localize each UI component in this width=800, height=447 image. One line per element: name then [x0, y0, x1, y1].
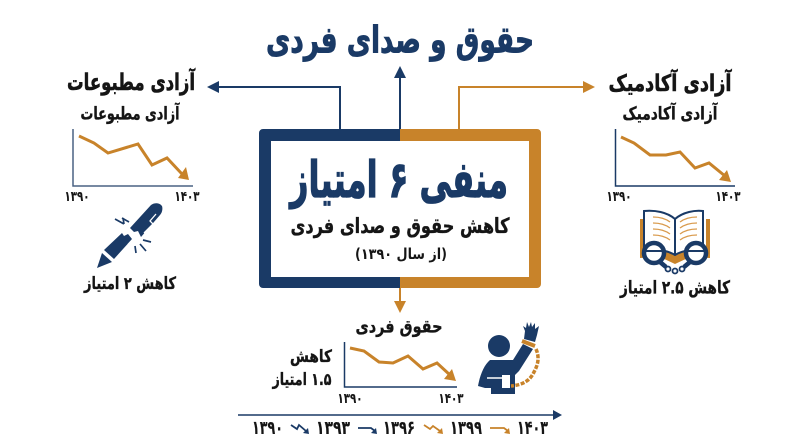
line chart [64, 129, 200, 205]
score drop: کاهش ۲ امتیاز [83, 274, 176, 294]
score drop: کاهش [290, 347, 332, 367]
arrow: to individual rights [394, 288, 406, 313]
arrow: to academic freedom [459, 81, 595, 129]
line chart [606, 129, 741, 205]
subheading: آزادی آکادمیک [622, 102, 718, 124]
score drop: ۱.۵ امتیاز [272, 370, 332, 390]
panel: central score [259, 129, 541, 288]
icon: chained person [478, 322, 539, 394]
timeline years: ۱۳۹۰ [252, 417, 283, 439]
since note: (از سال ۱۳۹۰) [355, 245, 447, 263]
line chart: ۱۴۰۳ [438, 391, 464, 407]
heading: حقوق فردی [356, 316, 442, 338]
heading: آزادی مطبوعات [67, 67, 196, 96]
subheading: آزادی مطبوعات [80, 102, 180, 124]
panel: academic freedom [606, 68, 741, 298]
title: حقوق و صدای فردی [266, 18, 534, 62]
timeline years [252, 417, 548, 439]
timeline years: ۱۴۰۳ [517, 417, 548, 439]
line chart: ۱۳۹۰ [64, 189, 90, 205]
panel: individual rights [272, 316, 539, 407]
timeline years: ۱۳۹۹ [450, 417, 482, 439]
timeline trend arrows [291, 425, 510, 434]
arrow: to title [394, 66, 406, 129]
score drop: کاهش ۲.۵ امتیاز [619, 278, 730, 298]
line chart: ۱۳۹۰ [606, 189, 632, 205]
timeline [238, 410, 562, 439]
timeline years: ۱۳۹۳ [316, 417, 350, 439]
headline score: منفی ۶ امتیاز [288, 151, 508, 209]
line chart: ۱۴۰۳ [716, 189, 741, 205]
icon: book in handcuffs [640, 211, 710, 274]
arrow: to press freedom [207, 81, 340, 129]
line chart: ۱۳۹۰ [338, 391, 362, 407]
line chart: ۱۴۰۳ [174, 189, 200, 205]
panel: press freedom [64, 67, 200, 294]
line chart [338, 342, 464, 407]
timeline years: ۱۳۹۶ [383, 417, 415, 439]
heading: آزادی آکادمیک [608, 68, 732, 97]
subtitle: کاهش حقوق و صدای فردی [290, 214, 510, 238]
icon: broken pen [97, 203, 162, 268]
score drop [272, 347, 332, 390]
